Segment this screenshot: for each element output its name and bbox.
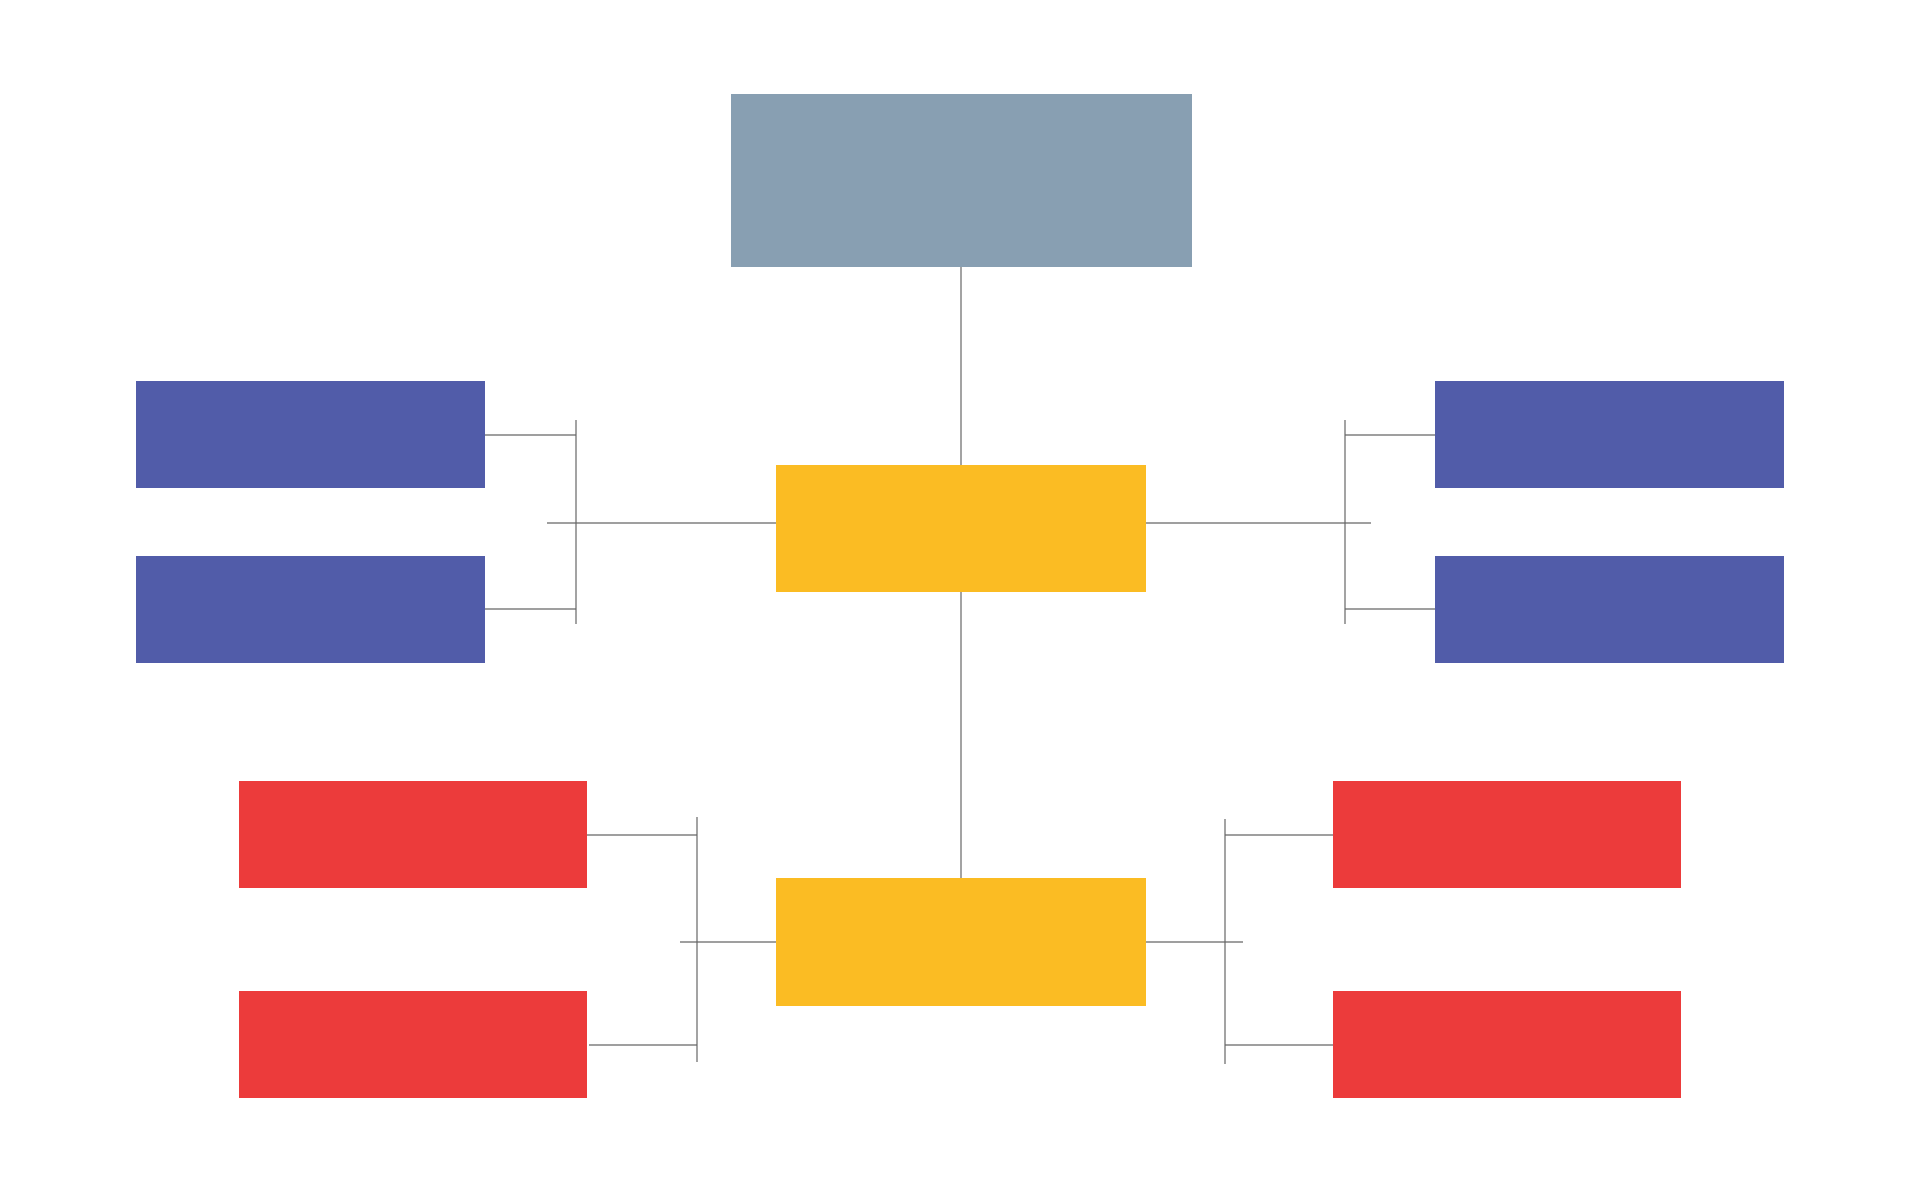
blue box right 2 bbox=[1435, 556, 1784, 663]
blue box left 2 bbox=[136, 556, 485, 663]
red box left 1 bbox=[239, 781, 587, 888]
center box lower bbox=[776, 878, 1146, 1006]
red box right 1 bbox=[1333, 781, 1681, 888]
top box bbox=[731, 94, 1192, 267]
center box upper bbox=[776, 465, 1146, 592]
connector lines bbox=[484, 267, 1435, 1064]
red box left 2 bbox=[239, 991, 587, 1098]
blue box left 1 bbox=[136, 381, 485, 488]
red box right 2 bbox=[1333, 991, 1681, 1098]
blue box right 1 bbox=[1435, 381, 1784, 488]
